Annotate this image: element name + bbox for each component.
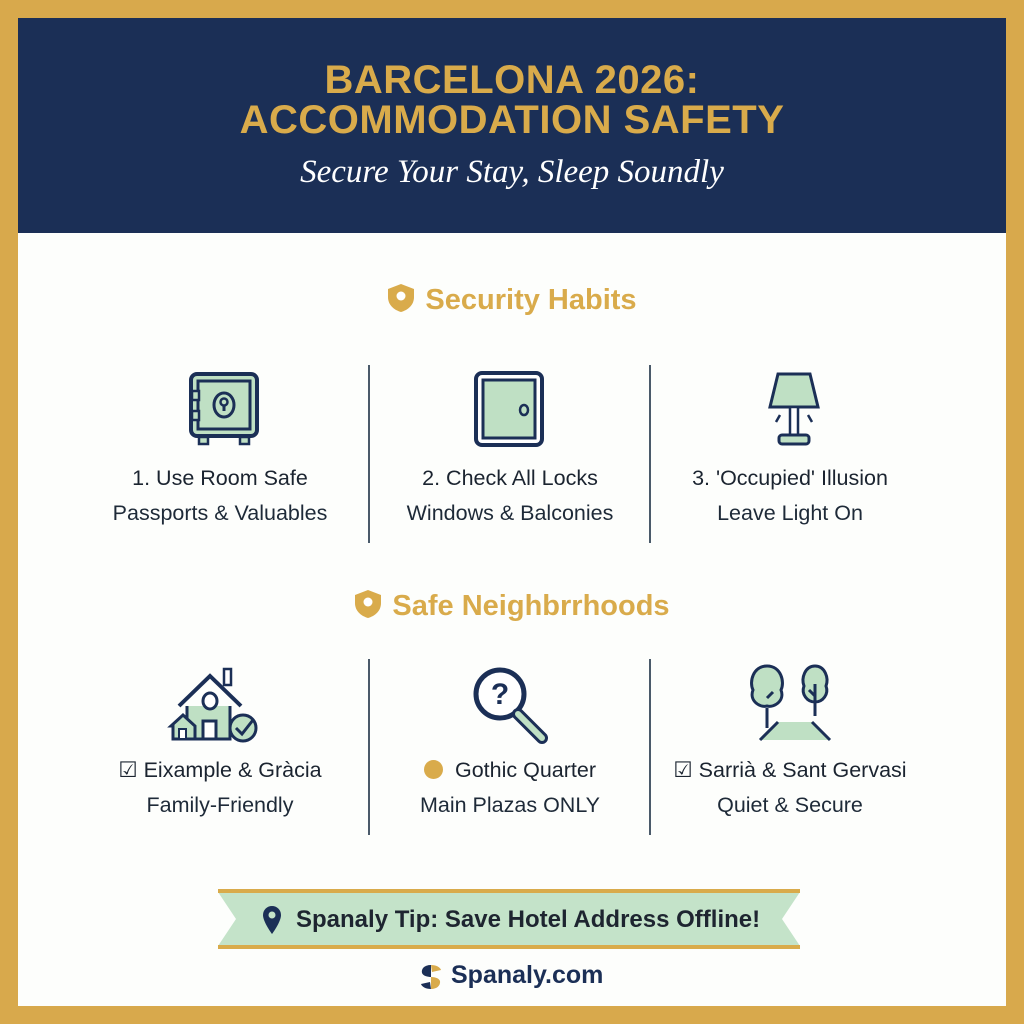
title: BARCELONA 2026: (324, 58, 699, 102)
title (240, 58, 784, 142)
title: ACCOMMODATION SAFETY (240, 98, 784, 142)
heading: security habits: Security Habits (425, 284, 637, 316)
text: sarria: Quiet & Secure (717, 793, 863, 817)
tip ribbon: Spanaly Tip: Save Hotel Address Offline! (296, 906, 760, 933)
text: sarria (673, 758, 907, 817)
text: eixample: Family-Friendly (147, 793, 293, 817)
text: gothic quarter: Gothic Quarter (455, 758, 596, 782)
subtitle: Secure Your Stay, Sleep Soundly (300, 154, 724, 190)
logo: Spanaly.com (451, 961, 603, 989)
text: occupied illusion (692, 466, 888, 525)
text: use room safe (113, 466, 327, 525)
icon: magnifier: ? (491, 678, 509, 711)
text: gothic quarter: Main Plazas ONLY (420, 793, 600, 817)
text: occupied illusion: Leave Light On (717, 501, 863, 525)
text: occupied illusion: 3. 'Occupied' Illusion (692, 466, 888, 490)
icon: door (474, 371, 544, 447)
icon: houses (167, 668, 258, 742)
header banner (18, 18, 1006, 233)
text: check all locks: 2. Check All Locks (422, 466, 598, 490)
text: use room safe: 1. Use Room Safe (132, 466, 308, 490)
icon: map pin (263, 906, 281, 934)
text: gothic quarter (420, 758, 600, 817)
text: eixample (118, 758, 322, 817)
icon: safe (189, 372, 259, 446)
text: check all locks (406, 466, 613, 525)
heading: safe neighborhoods: Safe Neighbrrhoods (392, 590, 670, 622)
text: eixample: ☑ Eixample & Gràcia (118, 758, 322, 782)
icon: magnifier (474, 668, 548, 744)
icon: trees and path (750, 664, 831, 741)
text: sarria: ☑ Sarrià & Sant Gervasi (673, 758, 907, 782)
icon: lamp (768, 372, 820, 446)
tip ribbon (218, 889, 800, 949)
text: check all locks: Windows & Balconies (407, 501, 613, 525)
text: use room safe: Passports & Valuables (113, 501, 327, 525)
